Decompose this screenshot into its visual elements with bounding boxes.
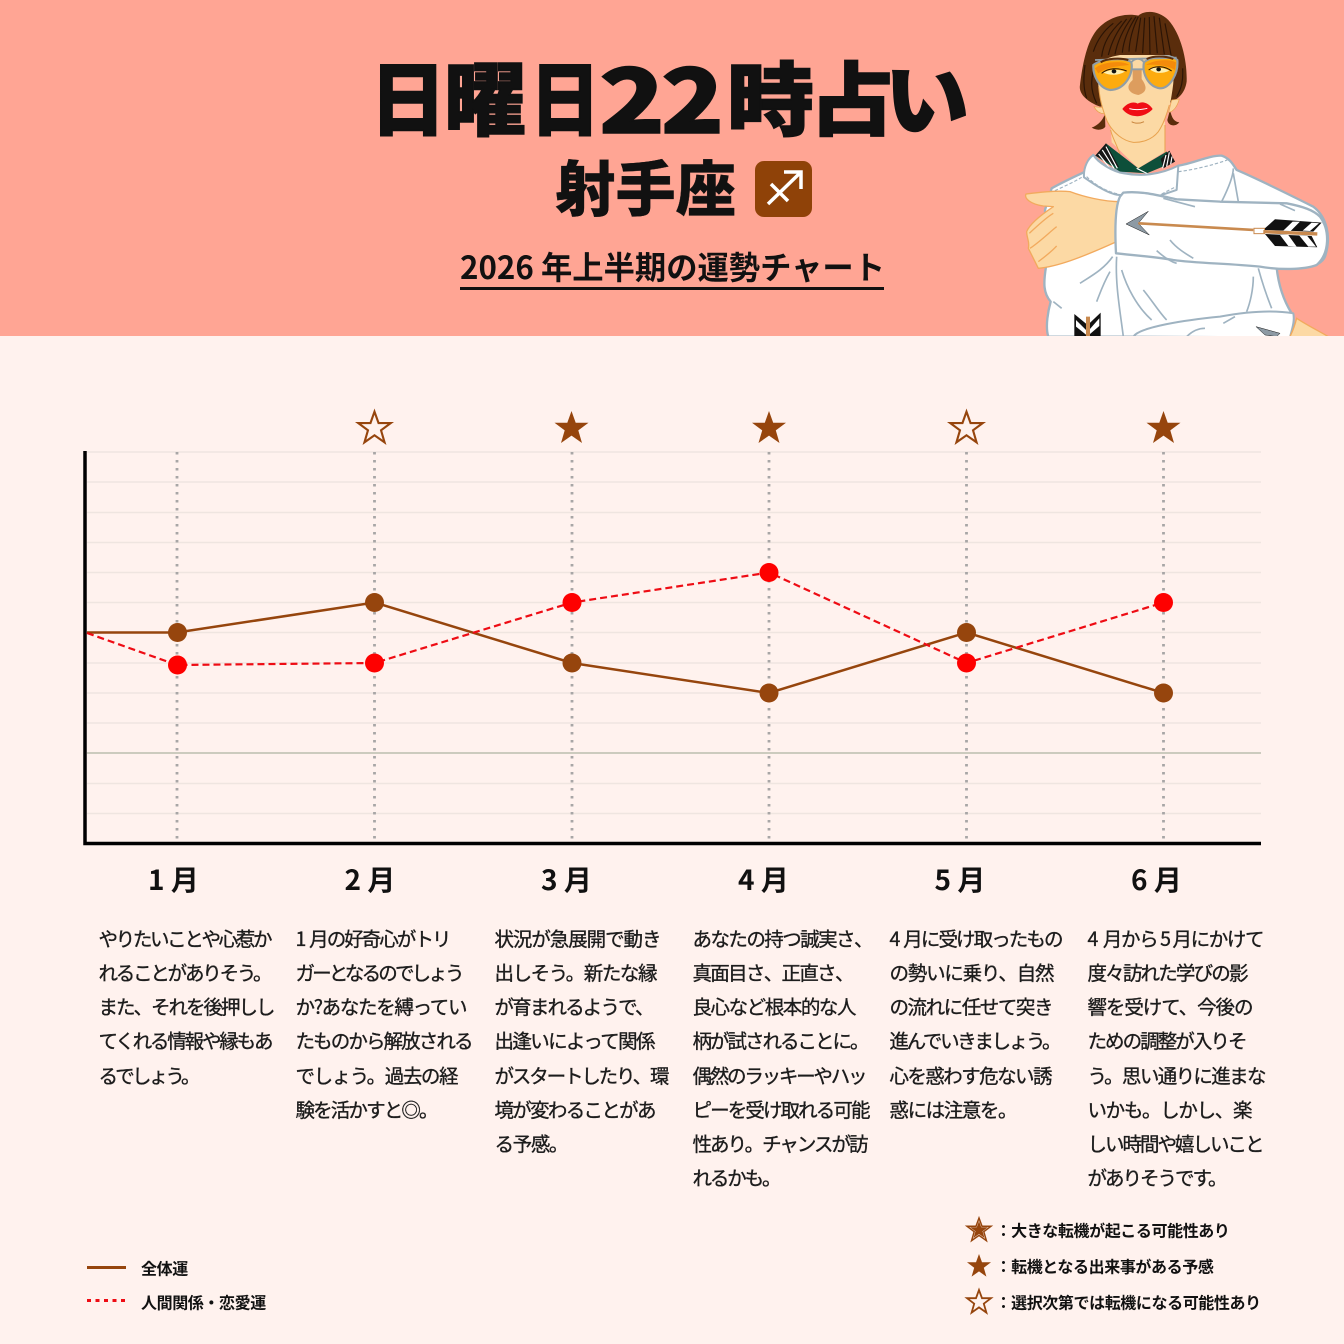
text block: March: が育まれるようで、 (494, 991, 654, 1020)
legend item: turning point event: ：転機となる出来事がある予感 (996, 1254, 1214, 1278)
text block: May: 4 月に受け取ったもの (890, 923, 1064, 952)
lower hand (1290, 318, 1328, 337)
legend: line types (87, 1256, 266, 1314)
fortune line chart (85, 451, 1261, 844)
points: overall fortune (168, 593, 1173, 702)
hair flips (1092, 110, 1179, 130)
month label: February: 2 月 (344, 859, 395, 899)
legend item: major turning point: ：大きな転機が起こる可能性あり (996, 1218, 1230, 1242)
lower sleeve (1133, 312, 1294, 337)
text block: May: 惑には注意を。 (890, 1094, 1018, 1123)
text block: April: れるかも。 (692, 1162, 782, 1191)
text block: February: でしょう。過去の経 (296, 1060, 458, 1089)
text block: June: ための調整が入りそ (1088, 1025, 1248, 1054)
text block: March: 出しそう。新たな縁 (494, 957, 658, 986)
month label: April: 4 月 (738, 859, 789, 899)
collar (1095, 143, 1175, 173)
title: 2 (599, 32, 665, 159)
month label: June: 6 月 (1131, 859, 1182, 899)
text block: January: てくれる情報や縁もあ (98, 1025, 274, 1054)
neck (1111, 122, 1165, 168)
star: March filled (554, 411, 588, 443)
text block: April: 柄が試されることに。 (692, 1025, 870, 1054)
vertical dotted month lines (177, 452, 1164, 840)
hand (1026, 191, 1120, 268)
text block: February: たものから解放される (296, 1025, 474, 1054)
text block: March: 出逢いによって関係 (494, 1025, 656, 1054)
title: 時 (727, 37, 814, 153)
text block: January (98, 923, 276, 1089)
jacket collar (1084, 155, 1178, 197)
text block: January: るでしょう。 (98, 1060, 200, 1089)
body jacket (1044, 155, 1328, 337)
text block: April: 性あり。チャンスが訪 (692, 1128, 868, 1157)
face (1098, 55, 1174, 126)
body folds (1053, 257, 1272, 337)
title (370, 32, 969, 159)
line: overall fortune (87, 602, 1164, 693)
subtitle: sagittarius: 射手座 (555, 142, 736, 229)
text block: April: 良心など根本的な人 (692, 991, 856, 1020)
axes (85, 451, 1261, 844)
baseline at zero (87, 752, 1261, 754)
text block: March: 状況が急展開で動き (494, 923, 662, 952)
title: 2 (661, 32, 724, 159)
text block: March: る予感。 (494, 1128, 568, 1157)
text block: February: 1 月の好奇心がトリ (296, 923, 452, 952)
icon: sagittarius symbol (755, 161, 812, 217)
month label: January: 1 月 (148, 859, 199, 899)
header band (0, 0, 1344, 336)
title: 曜 (444, 37, 526, 153)
text block: June: がありそうです。 (1088, 1162, 1228, 1191)
illustration: man with arrow sleeve (1026, 12, 1328, 337)
text block: February: ガーとなるのでしょう (296, 957, 464, 986)
horizontal grid lines (87, 452, 1261, 814)
month label: May: 5 月 (934, 859, 985, 899)
eye shadow (1095, 60, 1176, 73)
ears (1094, 99, 1179, 114)
month label: March: 3 月 (541, 859, 592, 899)
text block: May: の勢いに乗り、自然 (890, 957, 1054, 986)
legend: star types (967, 1218, 1261, 1314)
head and neck (1080, 12, 1187, 174)
text block: May (890, 923, 1064, 1123)
fringe (1100, 55, 1172, 59)
text block: April: ピーを受け取れる可能 (692, 1094, 870, 1123)
star: April filled (752, 411, 786, 443)
text block: April: 偶然のラッキーやハッ (692, 1060, 868, 1089)
lower arrow head (1256, 327, 1280, 337)
text block: February (296, 923, 474, 1123)
lenses (1093, 56, 1177, 90)
chart heading: 2026 年上半期の運勢チャート (460, 243, 885, 289)
lower arrow fletching (1074, 313, 1101, 337)
text block: June: しい時間や嬉しいこと (1088, 1128, 1264, 1157)
text block: June: 4 月から 5 月にかけて (1088, 923, 1264, 952)
lips (1122, 102, 1153, 116)
points: relationships and love (168, 563, 1173, 674)
text block: March: 境が変わることがあ (494, 1094, 656, 1123)
text block: January: やりたいことや心惹か (98, 923, 272, 952)
eyes (1103, 68, 1169, 75)
text block: May: 進んでいきましょう。 (890, 1025, 1062, 1054)
text block: June: う。思い通りに進まな (1088, 1060, 1266, 1089)
text block: January: また、それを後押しし (98, 991, 276, 1020)
line: relationships and love (87, 572, 1164, 665)
brows (1101, 56, 1173, 62)
text block: April (692, 923, 874, 1191)
text block: February: か?あなたを縛ってい (296, 991, 468, 1020)
star: June filled (1146, 411, 1180, 443)
legend item: depends on choice: ：選択次第では転機になる可能性あり (996, 1290, 1261, 1314)
star: May outline (950, 412, 983, 442)
text block: May: 心を惑わす危ない誘 (890, 1060, 1052, 1089)
star: February outline (358, 412, 391, 442)
forearm sleeve (1115, 192, 1327, 269)
text block: January: れることがありそう。 (98, 957, 272, 986)
text block: April: 真面目さ、正直さ、 (692, 957, 854, 986)
arrow on sleeve (1126, 211, 1149, 235)
frame bridge (1095, 58, 1177, 69)
title: い (885, 37, 969, 153)
legend item: relationships and love: 人間関係・恋愛運 (141, 1290, 266, 1314)
hair (1080, 12, 1187, 107)
text block: May: の流れに任せて突き (890, 991, 1054, 1020)
legend item: overall fortune (87, 1256, 188, 1280)
text block: March (494, 923, 670, 1157)
hair strands (1084, 16, 1183, 103)
nose (1128, 70, 1146, 95)
text block: April: あなたの持つ誠実さ、 (692, 923, 874, 952)
text block: June: 度々訪れた学びの影 (1088, 957, 1248, 986)
text block: June: いかも。しかし、楽 (1088, 1094, 1252, 1123)
legend item: overall fortune: 全体運 (141, 1256, 188, 1280)
text block: February: 験を活かすと◎。 (296, 1094, 438, 1123)
text block: June: 響を受けて、今後の (1088, 991, 1254, 1020)
title: 日 (370, 37, 446, 153)
title: 日 (530, 37, 600, 153)
title: 占 (810, 37, 894, 153)
text block: March: がスタートしたり、環 (494, 1060, 670, 1089)
text block: June (1088, 923, 1266, 1191)
